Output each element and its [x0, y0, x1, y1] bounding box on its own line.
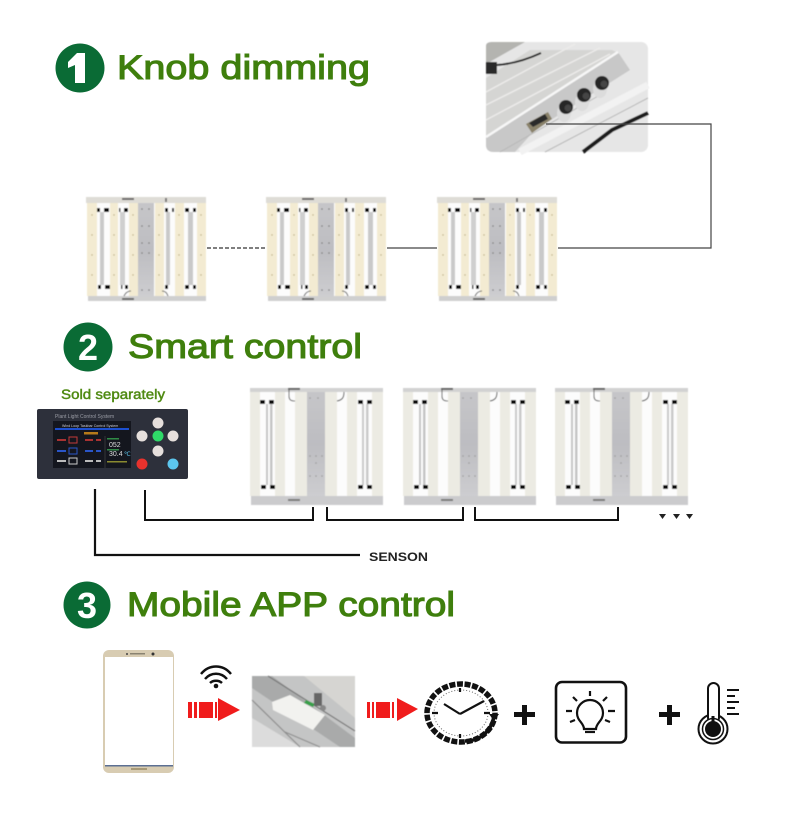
section 3 heading: mobile app control: 3	[77, 585, 97, 626]
arrow: module to timer	[367, 698, 418, 721]
plus sign	[659, 705, 680, 725]
section 2 heading: smart control	[64, 322, 362, 372]
section 3 heading: mobile app control: Mobile APP control	[127, 586, 455, 624]
controller screen: 052	[109, 442, 121, 449]
lamp 2	[266, 197, 386, 301]
section 1 heading: knob dimming: Knob dimming	[117, 49, 370, 87]
icon: phone	[103, 650, 174, 773]
section 2 heading: smart control: Smart control	[128, 328, 362, 366]
controller screen	[53, 421, 131, 468]
sold separately label: Sold separately	[61, 387, 165, 402]
section 2 heading: smart control: 2	[78, 327, 98, 368]
photo: wifi module	[252, 676, 355, 747]
icon: light bulb box	[556, 682, 626, 742]
controller screen: Wind Loop Taskbar Control System	[62, 424, 118, 428]
senson label: SENSON	[369, 550, 428, 564]
connection wires: knob row	[207, 124, 711, 248]
lamp 1	[86, 197, 206, 301]
arrow: phone to module	[188, 698, 240, 721]
lamp row 1	[86, 197, 557, 301]
icon: thermometer	[698, 683, 739, 744]
icon: wifi	[201, 666, 231, 688]
photo: knob control panel	[486, 42, 648, 152]
controller panel: Plant Light Control System	[55, 414, 114, 420]
lamp 3	[555, 388, 688, 505]
controller panel	[37, 409, 188, 479]
controller buttons	[136, 418, 178, 470]
controller screen: 30.4	[109, 451, 123, 458]
section 1 heading: knob dimming	[56, 44, 370, 92]
controller screen: ℃	[124, 452, 131, 458]
lamp row 2	[250, 388, 688, 505]
plus sign	[514, 705, 535, 725]
icon: clock	[427, 684, 499, 742]
lamp 3	[437, 197, 557, 301]
control wires	[95, 489, 618, 555]
continuation markers	[659, 514, 693, 519]
section 3 heading: mobile app control	[64, 582, 455, 628]
lamp 1	[250, 388, 383, 505]
lamp 2	[403, 388, 536, 505]
